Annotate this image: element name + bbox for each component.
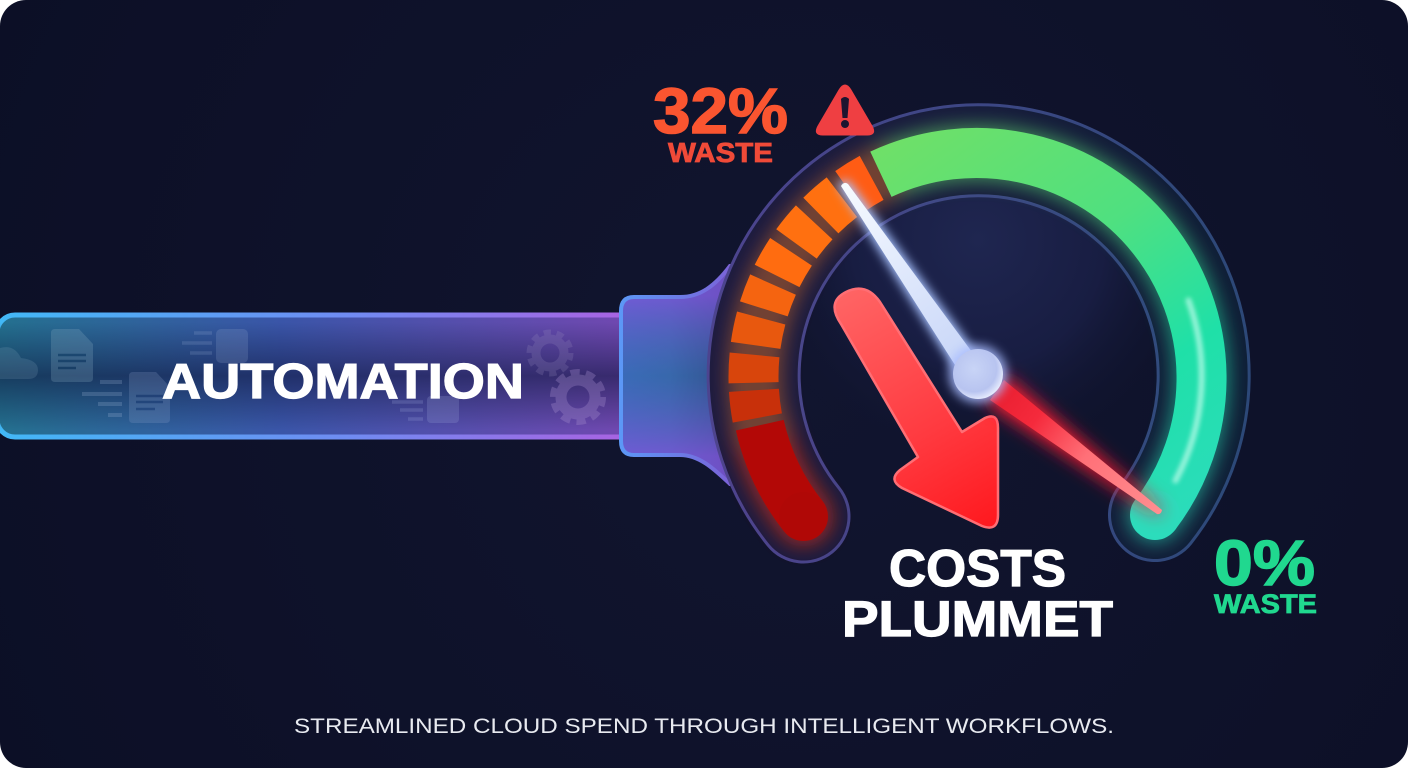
icon: faded document 3 <box>392 396 459 423</box>
icon: cloud <box>0 347 38 379</box>
label: costs plummet: PLUMMET <box>842 591 1113 647</box>
gauge glow <box>754 153 1202 516</box>
gauge green zone <box>881 153 1202 540</box>
icon: gear bottom <box>554 373 602 421</box>
needle hub <box>949 345 1007 403</box>
icon: document with speed lines <box>82 372 170 423</box>
gauge track <box>754 150 1204 517</box>
gauge orange segments <box>660 57 1299 696</box>
stat: 32% waste: WASTE <box>668 137 773 168</box>
green highlight <box>1176 300 1202 480</box>
gauge red zone <box>760 425 828 541</box>
handle collar <box>621 266 760 484</box>
label: automation: AUTOMATION <box>162 355 524 409</box>
label: costs plummet: COSTS <box>889 540 1066 598</box>
icon: gear top <box>530 333 570 373</box>
caption: STREAMLINED CLOUD SPEND THROUGH INTELLIGENT WORKFLOWS. <box>294 715 1114 738</box>
icon: faded document 2 <box>182 329 248 363</box>
stat: 32% waste: 32% <box>653 75 788 147</box>
icon: document 1 <box>51 329 93 382</box>
handle bar <box>0 315 657 437</box>
icon: warning triangle <box>816 85 874 135</box>
stat: 0% waste: WASTE <box>1214 589 1317 619</box>
label: costs plummet <box>842 540 1113 647</box>
gauge inner disc <box>800 196 1160 556</box>
red needle <box>986 376 1162 515</box>
gauge <box>660 57 1299 696</box>
panel: automation handle <box>0 266 760 484</box>
stat: 0% waste: 0% <box>1214 527 1315 599</box>
arrow: costs falling <box>835 289 998 528</box>
white needle <box>841 183 1007 403</box>
